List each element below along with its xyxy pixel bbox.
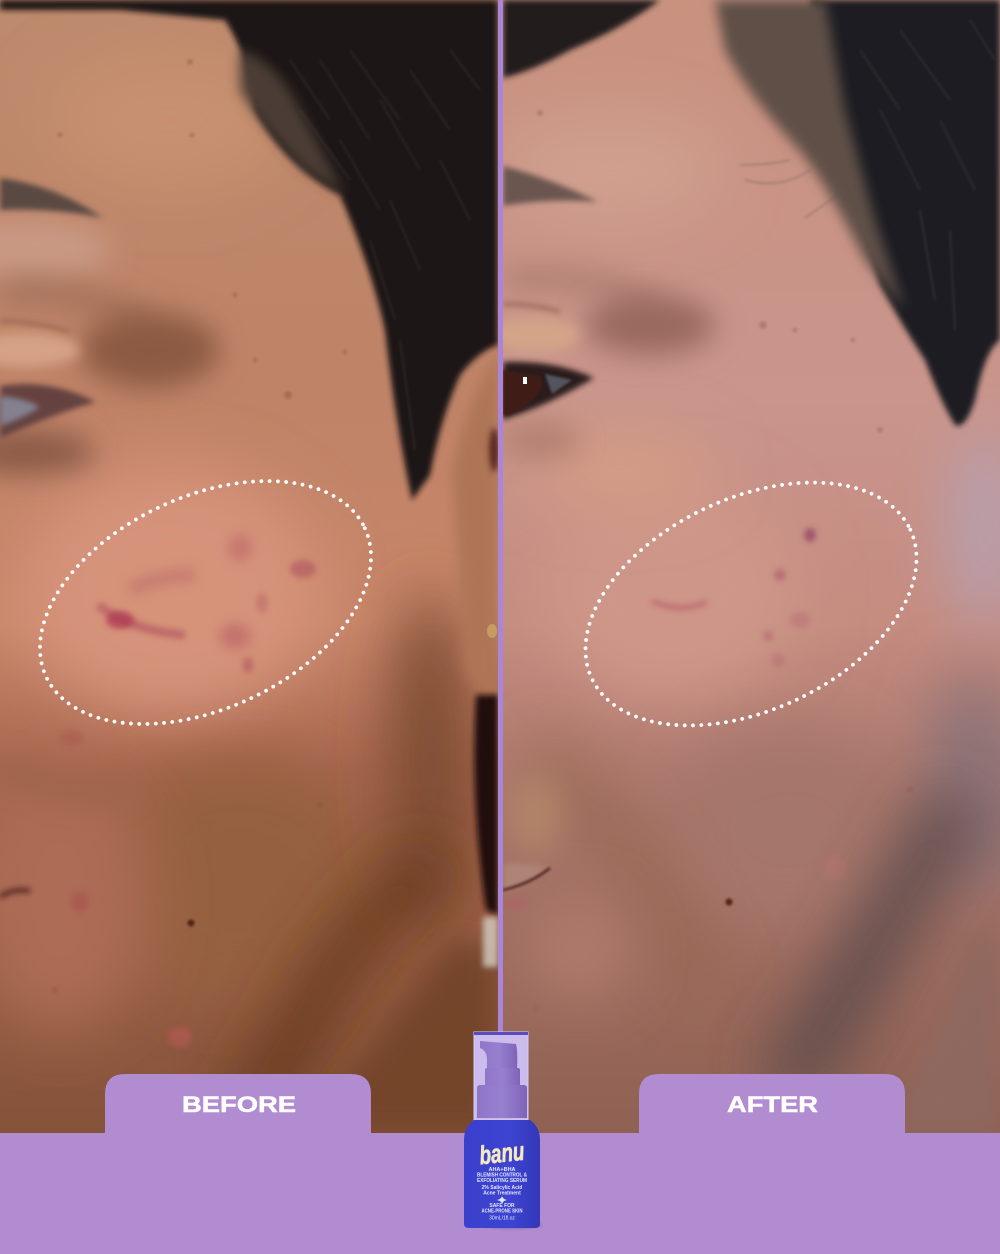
pale lilac edge of face [950,430,1000,630]
nose side highlight [510,775,560,855]
chin tone [530,900,630,1000]
photo: after, right face [490,0,1000,1134]
product bottle [464,1032,542,1229]
bottom band [0,1133,1000,1254]
eye socket shadow [585,295,715,355]
after label tab [639,1074,905,1134]
before label tab [105,1074,371,1134]
dotted ellipse: after [547,434,955,774]
upper eyelid fold [503,318,580,352]
product name: SAFE FOR [489,1203,515,1209]
acne marks [60,534,316,1047]
nasolabial fold [47,788,67,790]
side of face darker [390,590,470,930]
bottle shadow [482,1221,542,1229]
photo: before, left face [0,0,499,1134]
eye [503,362,594,420]
before label tab: BEFORE [182,1092,296,1117]
dark background behind neck [474,695,498,915]
mole [188,920,194,926]
under-eye shadow [0,430,95,474]
divider line [498,0,503,1032]
cheek glow [570,550,770,706]
pump collar [477,1085,527,1118]
hair fringe brown [715,0,905,310]
brow shadow band [503,278,660,310]
eyelid crease [503,304,560,312]
eyebrow [0,178,103,218]
mouth corner [0,890,30,897]
product name: ACNE-PRONE SKIN [482,1208,523,1214]
hair strands [740,20,995,330]
eye socket shadow [80,312,220,388]
ear [452,355,498,695]
bottle body [464,1120,540,1228]
product name: BLEMISH CONTROL & [477,1172,527,1178]
hair strands [290,50,480,450]
product name: 2% Salicylic Acid [482,1185,522,1191]
hair [810,0,1000,426]
clear cap [474,1032,528,1120]
nasolabial fold [530,750,710,990]
neck [346,935,498,1133]
brow shadow band [0,291,150,325]
forehead highlight [528,130,691,210]
hair fringe [240,50,345,195]
product name: AHA+BHA [488,1167,516,1173]
eyebrow [503,166,598,206]
upper eyelid fold [0,333,80,367]
eye [0,384,96,438]
product name: EXFOLIATING SERUM [477,1178,527,1184]
lips [503,864,548,892]
product name: 30mL/1fl.oz [489,1216,515,1222]
temple tone [88,76,250,162]
earring [487,624,497,638]
cheek glow [20,465,320,715]
lower cheek and jaw tone [144,747,357,892]
cap top edge [474,1032,528,1035]
freckles [52,59,348,993]
under-eye warm tone [577,455,648,480]
neck [880,930,1000,1134]
brand name: banu [478,1136,526,1170]
dotted ellipse: before [1,432,410,773]
acne marks [652,528,846,880]
jaw shadow [780,800,960,1090]
after label tab: AFTER [727,1092,818,1117]
under-eye shadow [500,422,580,458]
pump neck [485,1068,520,1086]
pump head [480,1041,517,1069]
jaw shadow [240,860,440,1120]
lower cheek [670,730,910,930]
product name: Acne Treatment [483,1190,521,1196]
front hair [503,0,660,78]
pale background patch [483,917,498,967]
freckles [533,110,913,1011]
mole [726,898,732,906]
brow bone highlight [0,220,110,280]
hair [0,0,498,500]
eyelid crease [0,321,70,332]
product name [477,1167,527,1222]
small sparkle icon [497,1196,507,1204]
